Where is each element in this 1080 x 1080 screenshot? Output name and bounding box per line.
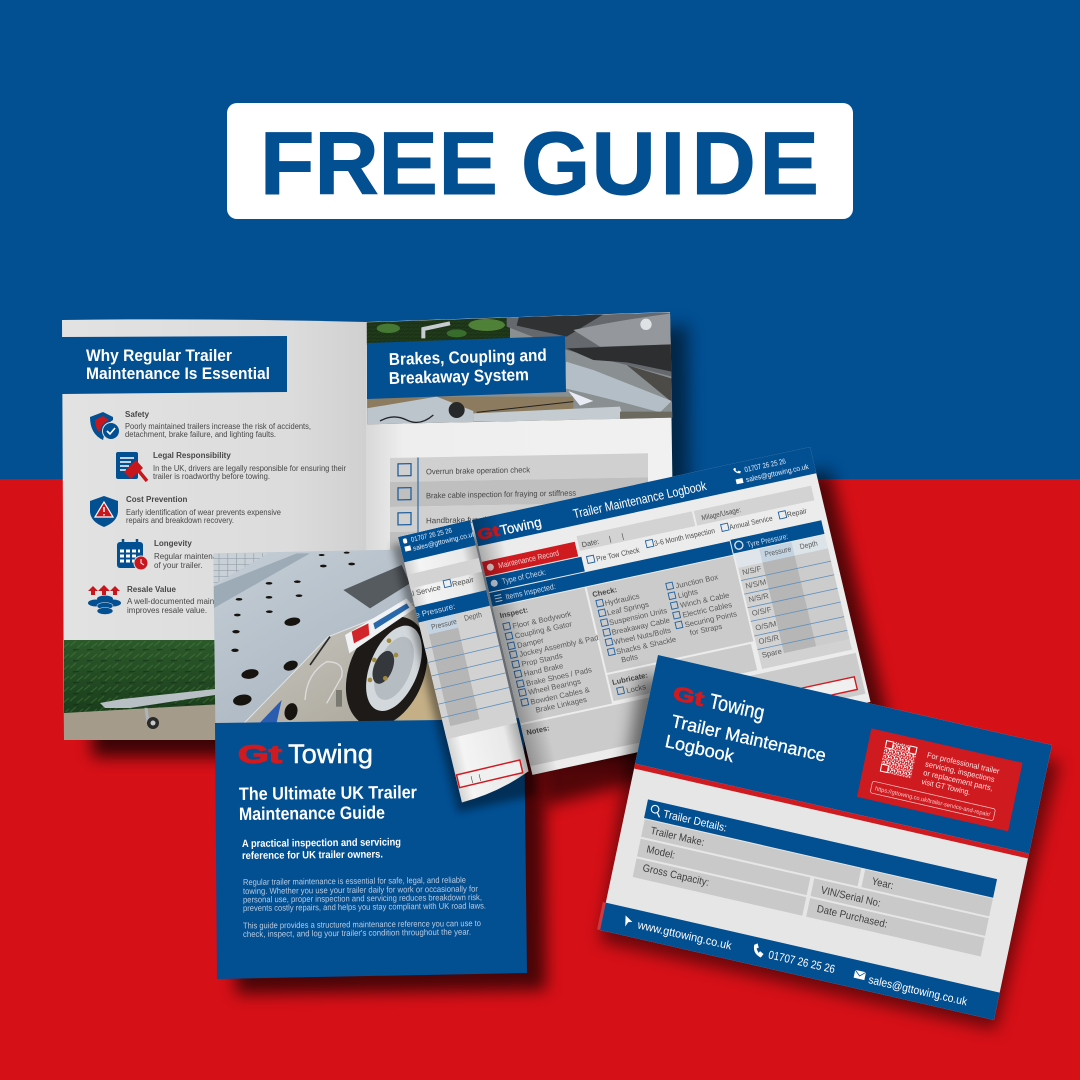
cover body text: check, inspect, and log your trailer's condition throughout the year.: [243, 927, 471, 939]
tyre pressure table: [735, 535, 852, 669]
text: resale value: improves resale value.: [127, 606, 207, 615]
maintenance record red tab: [482, 542, 578, 576]
left page title band: Why Regular Trailer: [86, 346, 232, 365]
open logbook right page: [472, 447, 871, 775]
inspect checklist panel: Brake Linkages: [535, 695, 588, 715]
trailer details band: [644, 799, 997, 898]
tyre pressure table: Depth: [799, 539, 818, 551]
right page: [366, 312, 672, 550]
logbook front cover: [597, 654, 1052, 1020]
text: longevity: [154, 539, 287, 570]
cover body text: [243, 875, 486, 939]
red stripe: [634, 764, 1029, 859]
check checklist panel: Bolts: [620, 652, 639, 664]
text: legal responsibility: [153, 451, 346, 481]
cover body text: prevents costly repairs, and helps you stay compliant with UK road laws.: [243, 900, 486, 913]
tyre pressure table: Pressure: [764, 544, 792, 559]
cover body text: This guide provides a structured maintenance reference you can use to: [243, 918, 481, 930]
logbook header: Towing: [498, 514, 543, 538]
inspect checklist panel: Floor & Bodywork: [512, 609, 572, 631]
trailer details form: Trailer Make:: [649, 825, 705, 849]
logbook header: [472, 447, 816, 546]
type of check band: Type of Check:: [501, 568, 547, 586]
shadow: open guide bottom: [92, 700, 690, 757]
text: resale value: [127, 585, 268, 615]
brake checklist: [390, 453, 648, 642]
qr promo box: https://gttowing.co.uk/trailer-service-and-repair/: [874, 786, 991, 818]
text: resale value: A well-documented maintenance history: [127, 597, 268, 606]
tyre pressure band: [730, 520, 824, 554]
trailer details form: Gross Capacity:: [641, 862, 710, 889]
type of check options: Pre Tow Check: [595, 545, 641, 564]
cover subtitle: A practical inspection and servicing: [242, 836, 401, 850]
check checklist panel: [587, 556, 753, 673]
qr promo box: For professional trailer: [926, 751, 1001, 776]
text: safety: [125, 410, 311, 439]
qr promo box: or replacement parts,: [923, 768, 994, 793]
inspect checklist panel: [493, 587, 614, 723]
lubricate panel: Lubricate:: [611, 671, 649, 687]
photo: trailer in front of hedge: [64, 640, 224, 740]
tyre pressure table: Spare: [761, 647, 783, 660]
right page title band: [367, 336, 566, 399]
photo: car and trailer drawbar: [366, 312, 672, 424]
text: safety: Poorly maintained trailers increase the risk of accidents,: [125, 422, 311, 431]
icon: calendar and clock: [117, 539, 148, 570]
items inspected band: Items Inspected:: [505, 582, 557, 601]
check checklist panel: for Straps: [689, 622, 723, 637]
type of check options: 3-6 Month Inspection: [653, 526, 716, 548]
cover body text: towing. Whether you use your trailer daily for work or occasionally for: [243, 884, 478, 896]
right page title band: Breakaway System: [389, 365, 529, 388]
curl check row: Annual Service: [390, 583, 441, 603]
inspect checklist panel: Bowden Cables &: [530, 685, 591, 707]
check checklist panel: Lights: [677, 587, 699, 600]
curl date red box: [457, 760, 523, 788]
text: longevity: of your trailer.: [154, 561, 202, 570]
logbook cover footer: [597, 902, 1000, 1020]
curl tyre pressure table: Pressure: [430, 617, 458, 632]
text: legal responsibility: In the UK, drivers are legally responsible for ensuring their: [153, 464, 346, 473]
date and mileage fields: |: [621, 531, 625, 541]
inspect checklist panel: Wheel Bearings: [527, 677, 582, 697]
logbook header: sales@gttowing.co.uk: [745, 462, 810, 484]
left page title band: [62, 336, 287, 394]
left page title band: Maintenance Is Essential: [86, 364, 270, 383]
notes panel: Notes:: [526, 723, 550, 737]
logbook cover title: Logbook: [663, 731, 737, 766]
icon: resale arrows and coins: [88, 585, 121, 614]
date and mileage fields: |: [608, 534, 612, 543]
text: safety: detachment, brake failure, and lighting faults.: [125, 430, 276, 439]
trailer details form: VIN/Serial No:: [820, 884, 882, 910]
tyre pressure table: N/S/M: [744, 577, 767, 591]
icon: warning shield: [90, 496, 118, 527]
curl check row: Repair: [451, 575, 475, 589]
check checklist panel: Securing Points: [684, 609, 738, 629]
inspect checklist panel: Coupling & Gator: [514, 619, 573, 640]
brake checklist: Brake cable inspection for fraying or stiffness: [426, 489, 576, 500]
trailer details form: Year:: [871, 875, 895, 892]
trailer details form: Model:: [645, 843, 676, 862]
inspect checklist panel: Inspect:: [499, 605, 529, 620]
type of check band: [486, 557, 585, 592]
qr promo box: visit GT Towing.: [921, 777, 971, 797]
curl date red box: | |: [470, 773, 482, 784]
logbook cover title: Trailer Maintenance: [670, 711, 828, 766]
brake checklist: Handbrake function test: [426, 515, 511, 525]
cover title: The Ultimate UK Trailer: [239, 782, 417, 804]
brake checklist: Overrun brake operation check: [426, 465, 531, 476]
icon: safety shield: [90, 412, 120, 440]
logbook cover logo: Towing: [707, 690, 767, 725]
trailer details form: Date Purchased:: [816, 903, 888, 931]
inspect checklist panel: Brake Shoes / Pads: [525, 665, 593, 688]
maintenance record red tab: Maintenance Record: [497, 549, 560, 570]
qr code: [880, 740, 918, 778]
text: safety: Safety: [125, 410, 150, 419]
check checklist panel: Shacks & Shackle: [615, 635, 677, 656]
logbook cover title: [663, 710, 828, 786]
date and mileage fields: Date:: [581, 537, 600, 549]
check checklist panel: Electric Cables: [681, 600, 733, 620]
left page: [62, 319, 366, 740]
curl tyre pressure table: Depth: [463, 610, 483, 623]
guide cover: [210, 547, 543, 979]
tyre pressure band: Tyre Pressure:: [746, 532, 789, 549]
date and mileage fields: [577, 486, 814, 551]
qr promo box: [857, 728, 1023, 831]
logbook header: Trailer Maintenance Logbook: [572, 478, 708, 521]
items inspected band: [489, 541, 733, 607]
check checklist panel: Junction Box: [675, 572, 719, 590]
type of check options: [586, 506, 809, 565]
lubricate panel: [607, 644, 757, 701]
background: blue top half: [0, 0, 1080, 479]
background: red bottom half: [0, 479, 1080, 1080]
text: longevity: Longevity: [154, 539, 192, 548]
logbook cover header: [635, 655, 1052, 854]
check checklist panel: Leaf Springs: [606, 600, 650, 617]
check checklist panel: Breakaway Cable: [611, 616, 671, 637]
shadow: logbook cover: [600, 675, 1060, 1030]
cover subtitle: [242, 836, 401, 862]
text: longevity: Regular maintenance extends the life: [154, 552, 287, 561]
logbook header: 01707 26 25 26: [744, 457, 787, 474]
logbook header: Gt: [476, 523, 501, 544]
type of check options: Annual Service: [728, 514, 773, 532]
cover title: [239, 782, 417, 824]
type of check options: Repair: [786, 506, 808, 519]
cover subtitle: reference for UK trailer owners.: [242, 849, 383, 862]
signature red box: [785, 677, 857, 704]
logbook cover footer: www.gttowing.co.uk: [636, 919, 733, 953]
curl header contact: [398, 519, 478, 562]
tyre pressure table: N/S/F: [741, 564, 763, 577]
lubricate panel: Locks: [625, 682, 647, 695]
cover body text: personal use, proper inspection and servicing reduces breakdown risk,: [243, 892, 482, 904]
open logbook curled left page: [398, 520, 528, 802]
text: legal responsibility: Legal Responsibility: [153, 451, 231, 460]
curl header contact: sales@gttowing.co.uk: [412, 531, 477, 553]
text: cost prevention: Cost Prevention: [126, 495, 187, 504]
check checklist panel: Wheel Nuts/Bolts: [613, 626, 672, 647]
text: legal responsibility: trailer is roadworthy before towing.: [153, 472, 270, 481]
inspect checklist panel: Prop Stands: [521, 651, 564, 669]
curl header contact: 01707 26 25 26: [410, 527, 453, 544]
cover logo: Gt: [238, 741, 283, 769]
inspect checklist panel: Jockey Assembly & Pad: [518, 633, 599, 659]
notes panel: [521, 653, 866, 766]
curl check row: [407, 558, 482, 596]
cover photo: galvanised trailer deck and wheel: [213, 550, 519, 723]
open guide brochure: [62, 305, 680, 740]
tyre pressure table: O/S/M: [754, 619, 777, 632]
logbook cover footer: 01707 26 25 26: [767, 949, 836, 976]
cover title: Maintenance Guide: [239, 802, 385, 824]
text: cost prevention: [126, 495, 282, 525]
check checklist panel: Hydraulics: [604, 591, 641, 608]
check checklist panel: Winch & Cable: [679, 590, 730, 610]
trailer details band: Trailer Details:: [662, 808, 728, 835]
shadow: guide cover: [236, 600, 546, 994]
trailer details form: [632, 799, 997, 956]
cover logo: Towing: [288, 739, 373, 769]
inspect checklist panel: Hand Brake: [523, 661, 564, 678]
text: cost prevention: Early identification of wear prevents expensive: [126, 508, 282, 517]
icon: legal document and gavel: [116, 452, 147, 481]
check checklist panel: Suspension Units: [608, 606, 668, 627]
shadow: logbook curl on cover: [392, 530, 536, 812]
curl tyre pressure table: Tyre Pressure:: [404, 602, 456, 623]
curl tyre pressure table: [414, 590, 517, 740]
check checklist panel: Check:: [591, 585, 618, 599]
cover blue panel: [215, 718, 527, 979]
shadow: open guide right side: [600, 325, 692, 720]
text: cost prevention: repairs and breakdown recovery.: [126, 516, 234, 525]
cover body text: Regular trailer maintenance is essential for safe, legal, and reliable: [243, 875, 466, 887]
logbook cover footer: sales@gttowing.co.uk: [867, 974, 968, 1008]
logbook cover logo: [671, 682, 767, 725]
heading badge: Free Guide: FREE GUIDE: [260, 113, 819, 213]
date and mileage fields: Milage/Usage:: [701, 505, 742, 522]
tyre pressure table: N/S/R: [748, 591, 770, 604]
shadow: open logbook: [520, 470, 888, 806]
logbook cover logo: Gt: [671, 683, 706, 711]
text: resale value: Resale Value: [127, 585, 176, 594]
right page title band: Brakes, Coupling and: [389, 346, 547, 369]
tyre pressure table: O/S/R: [758, 633, 780, 646]
cover logo: [238, 739, 373, 769]
inspect checklist panel: Damper: [516, 636, 545, 650]
tyre pressure table: O/S/F: [751, 605, 773, 618]
qr promo box: servicing, inspections: [924, 759, 996, 784]
